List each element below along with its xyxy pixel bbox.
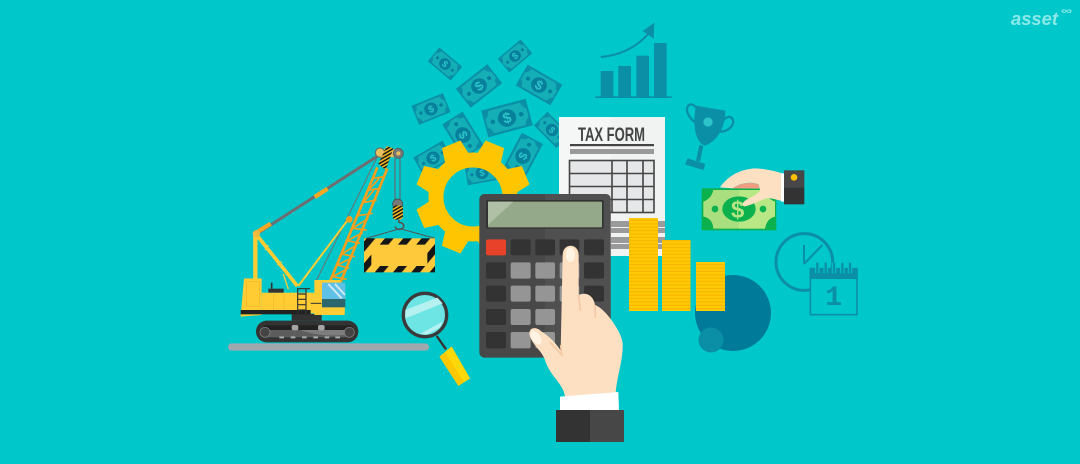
fingernails [528, 247, 575, 346]
bill 1: $ [440, 59, 450, 69]
hand [733, 183, 759, 189]
bill 2 [456, 64, 502, 108]
shirt cuff [560, 392, 619, 410]
bill 4: $ [532, 77, 547, 94]
bill 2: $ [472, 77, 487, 94]
lattice boom [330, 167, 387, 282]
bill 7: $ [455, 128, 471, 142]
hanging hazard sign [364, 229, 435, 272]
bill 10: $ [515, 149, 531, 162]
gear [415, 139, 531, 255]
logo: asset [1011, 6, 1072, 29]
boom tip [375, 146, 403, 170]
hand [529, 246, 623, 397]
tax form table [570, 160, 654, 212]
rear mast and braces [253, 219, 348, 289]
ground line [228, 343, 429, 351]
logo: asset: asset [1011, 9, 1059, 29]
trophy icon [685, 104, 733, 170]
bill 9: $ [428, 152, 439, 165]
bill 3: $ [510, 51, 520, 61]
bill 3 [498, 39, 532, 73]
crane body [241, 278, 345, 317]
crawler tracks [256, 314, 358, 342]
hand holding green banknote [702, 168, 804, 230]
bill 1 [428, 47, 462, 81]
hook block [393, 199, 404, 229]
bill 8 [534, 112, 570, 148]
keypad [486, 239, 604, 348]
money bills cloud [411, 39, 570, 185]
dark blue circle [695, 275, 771, 352]
jacket sleeve [556, 410, 624, 442]
bill 11 [465, 161, 499, 185]
banknote: $ [731, 197, 744, 224]
bill 11: $ [479, 168, 485, 178]
bill 5: $ [427, 104, 436, 116]
bill 6 [481, 99, 533, 137]
crane [228, 146, 435, 351]
calendar: 1 [825, 283, 842, 314]
pointing hand and sleeve [528, 246, 624, 442]
bill 4 [516, 65, 562, 105]
tax form [559, 117, 665, 256]
display [486, 200, 604, 229]
cuff [781, 173, 784, 202]
bill 9 [413, 141, 453, 175]
ladder [298, 289, 310, 314]
tax form title: TAX FORM [578, 125, 645, 146]
bill 5 [411, 93, 451, 125]
clock and calendar icon [776, 234, 857, 315]
stacks of gold coins [629, 218, 725, 311]
hook cables [395, 158, 400, 201]
pendant cables [257, 157, 377, 280]
bill 8: $ [547, 125, 557, 135]
bill 7 [442, 112, 484, 158]
bill 6: $ [501, 109, 514, 128]
sleeve [784, 170, 804, 204]
calculator [479, 194, 611, 358]
growth bar chart icon [595, 23, 672, 98]
logo: asset: ∞ [1061, 6, 1072, 17]
bill 10 [503, 133, 543, 179]
magnifying glass [403, 293, 470, 386]
